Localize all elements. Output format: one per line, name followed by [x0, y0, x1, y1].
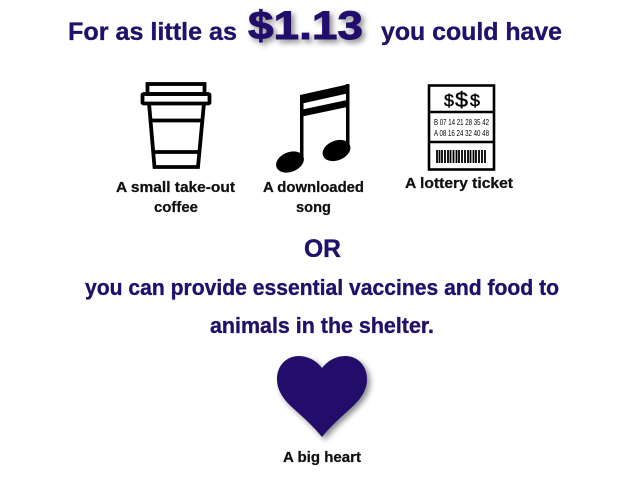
icon: coffee cup	[142, 84, 210, 167]
text block: provide vaccines	[85, 275, 559, 338]
title: For as little as	[68, 18, 237, 46]
label: coffee: coffee	[154, 200, 198, 216]
icon: heart	[277, 356, 367, 437]
label: song: song	[296, 200, 331, 216]
icon: lottery ticket: $	[455, 89, 468, 112]
label: coffee	[116, 180, 235, 216]
title	[68, 4, 562, 48]
icon: lottery ticket: B 07 14 21 28 35 42	[434, 117, 489, 127]
icon: music notes	[273, 84, 354, 177]
label: song	[263, 180, 364, 216]
heading: OR: OR	[304, 235, 341, 263]
price: $1.13	[248, 4, 363, 48]
text block: provide vaccines: animals in the shelter.	[210, 313, 434, 338]
icon: lottery ticket: A 08 16 24 32 40 48	[434, 128, 489, 138]
label: song: A downloaded	[263, 180, 364, 196]
label: heart: A big heart	[283, 450, 361, 466]
label: coffee: A small take-out	[116, 180, 235, 196]
icon: lottery ticket: $	[470, 91, 481, 110]
label: lottery ticket: A lottery ticket	[405, 176, 513, 192]
title: you could have	[381, 18, 562, 46]
icon: lottery ticket: $	[444, 91, 455, 110]
text block: provide vaccines: you can provide essential vaccines and food to	[85, 275, 559, 300]
icon: lottery ticket	[429, 86, 494, 170]
